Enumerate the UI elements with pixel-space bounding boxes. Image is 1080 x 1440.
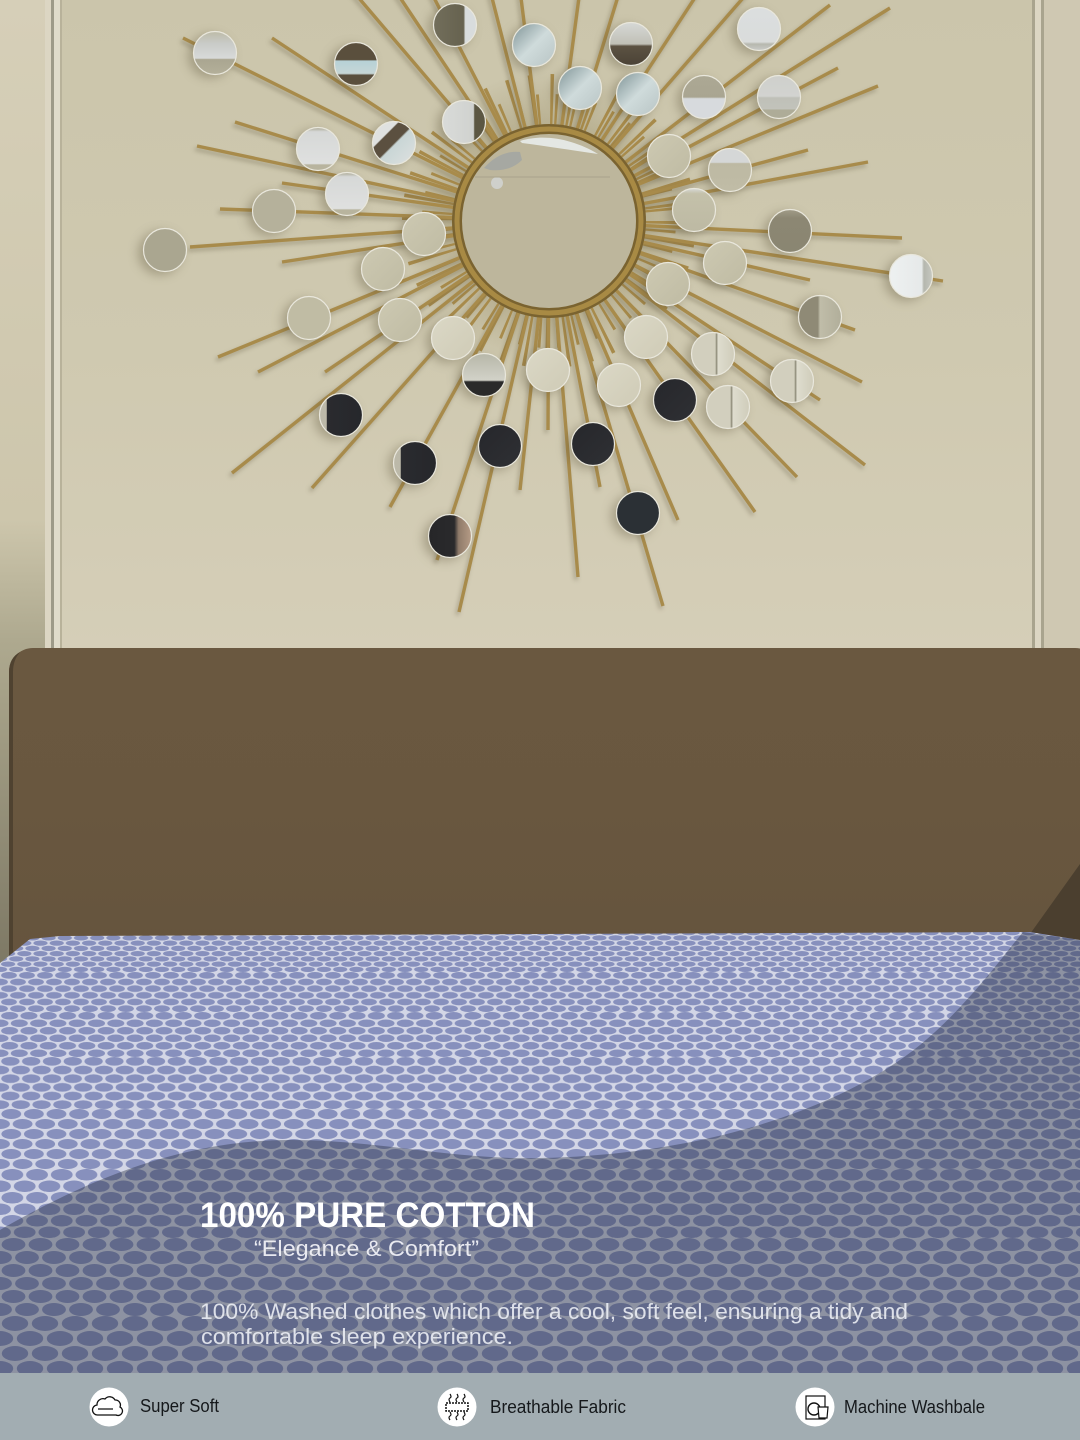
label: Breathable Fabric (490, 1397, 626, 1417)
bed headboard (9, 648, 1080, 968)
wall (0, 0, 1080, 700)
central mirror glass (462, 134, 636, 308)
heading: 100% PURE COTTON (200, 1196, 535, 1235)
body text (200, 1299, 908, 1349)
icon: cloud (90, 1388, 128, 1426)
headboard left edge shading (9, 652, 20, 960)
frame gold ring (457, 129, 641, 313)
label: Super Soft (140, 1396, 219, 1416)
small round mirrors (144, 4, 932, 558)
footer bar (0, 1373, 1080, 1440)
sunburst mirror (144, 0, 943, 612)
central mirror frame (452, 124, 646, 318)
bed sheet with honeycomb pattern (0, 930, 1080, 1376)
icon: airflow through fabric (438, 1388, 476, 1426)
feature: super soft (90, 1388, 219, 1426)
long gold spokes (183, 0, 943, 612)
subheading: “Elegance & Comfort” (254, 1236, 479, 1261)
body text: 100% Washed clothes which offer a cool, soft feel, ensuring a tidy and (200, 1299, 908, 1324)
icon: washing machine (796, 1388, 834, 1426)
mirror reflection: ceiling and chandelier (475, 138, 610, 189)
short spokes (427, 99, 671, 343)
headboard corner shadow (1030, 864, 1080, 942)
feature: breathable fabric (438, 1388, 626, 1426)
dark wave overlay (0, 932, 1080, 1373)
body text: comfortable sleep experience. (201, 1324, 513, 1349)
wall side panels and moulding (0, 0, 1080, 1000)
feature: machine washable (796, 1388, 985, 1426)
label: Machine Washbale (844, 1397, 985, 1417)
spoke shadow halo (399, 71, 699, 371)
